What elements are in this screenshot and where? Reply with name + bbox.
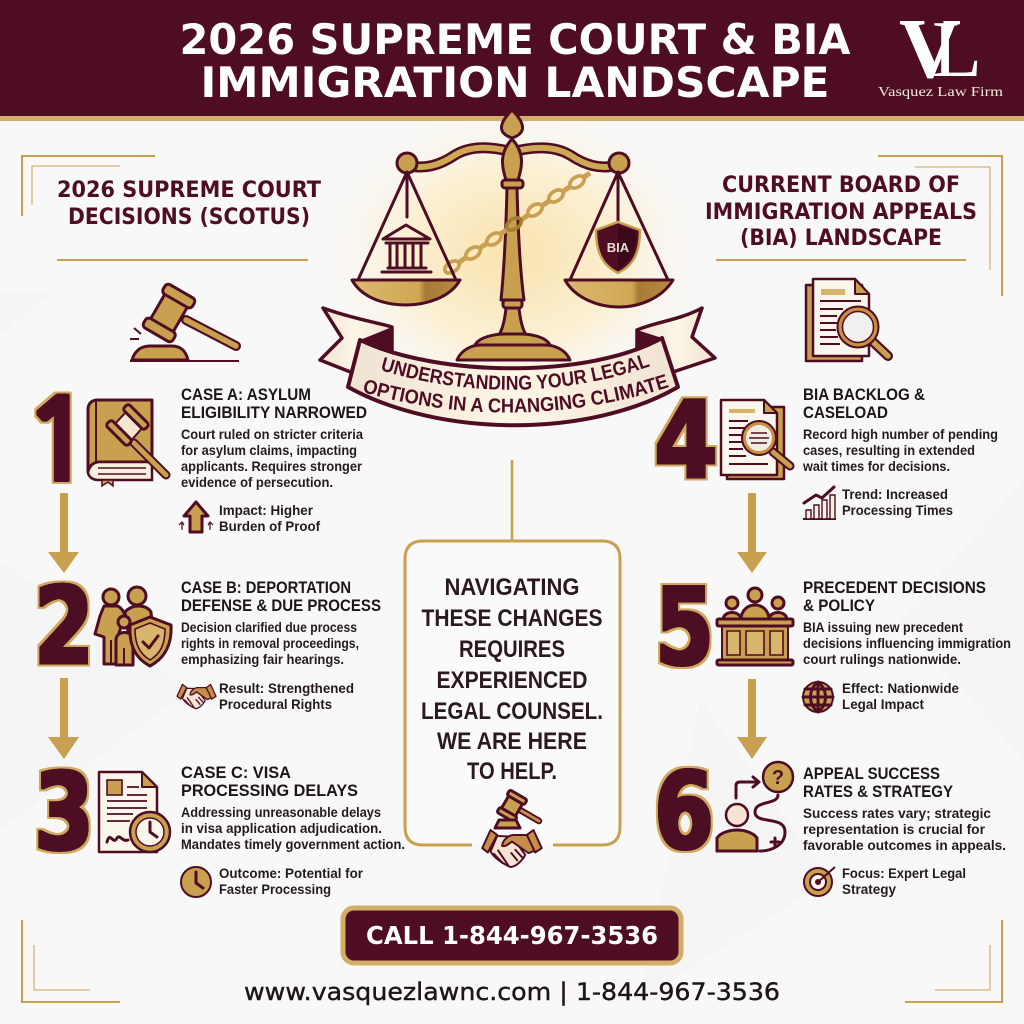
right pan: BIA bbox=[607, 240, 630, 255]
effect note: Effect: Nationwide bbox=[842, 680, 959, 696]
logo: Vasquez Law Firm bbox=[878, 0, 1003, 100]
case 1 text: for asylum claims, impacting bbox=[181, 442, 357, 458]
heading: BIA: (BIA) LANDSCAPE bbox=[740, 226, 942, 251]
case 4 text: Record high number of pending bbox=[803, 426, 998, 442]
case 6 text: Success rates vary; strategic bbox=[803, 805, 991, 821]
panel: case 5 bbox=[655, 566, 1011, 712]
pole bbox=[457, 110, 570, 360]
header band bbox=[0, 0, 1024, 121]
beam bbox=[397, 148, 629, 173]
result note: Procedural Rights bbox=[219, 696, 332, 712]
case 1 text: CASE A: ASYLUM bbox=[181, 386, 311, 404]
bottom corner frames bbox=[22, 920, 1002, 1002]
number 4: 4 bbox=[654, 379, 718, 502]
ribbon banner: UNDERSTANDING YOUR LEGAL bbox=[382, 355, 650, 390]
heading: BIA: IMMIGRATION APPEALS bbox=[705, 200, 977, 225]
heading: SCOTUS bbox=[57, 178, 321, 230]
case 6 text: favorable outcomes in appeals. bbox=[803, 837, 1006, 853]
center callout: THESE CHANGES bbox=[422, 605, 602, 632]
case 4 text: BIA BACKLOG & bbox=[803, 386, 925, 404]
icon: person with question bbox=[717, 762, 793, 851]
panel: case 3 bbox=[34, 751, 405, 897]
chain bbox=[443, 173, 590, 276]
case 3 text bbox=[181, 764, 405, 852]
number 1: 1 bbox=[22, 386, 96, 497]
title: 2026 SUPREME COURT & BIA bbox=[180, 15, 851, 64]
case 4 text: wait times for decisions. bbox=[802, 458, 950, 474]
center callout bbox=[405, 541, 620, 867]
case 1 text: Court ruled on stricter criteria bbox=[181, 426, 363, 442]
logo: Vasquez Law Firm: L bbox=[932, 6, 982, 94]
icon: court bench bbox=[717, 588, 793, 665]
impact note: Impact: Higher bbox=[219, 502, 314, 518]
center callout: EXPERIENCED bbox=[436, 667, 588, 694]
focus note bbox=[804, 865, 966, 897]
arrow 4 to 5 bbox=[737, 493, 767, 573]
right pan bbox=[565, 172, 673, 307]
icon: document review bbox=[721, 400, 790, 479]
ribbon banner bbox=[318, 306, 717, 428]
case 3 text: PROCESSING DELAYS bbox=[181, 782, 358, 800]
case 5 text: & POLICY bbox=[803, 597, 875, 615]
case 2 text: emphasizing fair hearings. bbox=[181, 651, 344, 667]
case 6 text bbox=[803, 765, 1006, 853]
trend note: Trend: Increased bbox=[842, 486, 948, 502]
arrow 2 to 3 bbox=[48, 678, 79, 759]
case 2 text: Decision clarified due process bbox=[181, 619, 357, 635]
center callout: WE ARE HERE bbox=[437, 728, 587, 755]
case 2 text: rights in removal proceedings, bbox=[181, 635, 359, 651]
case 4 text: CASELOAD bbox=[803, 404, 888, 422]
case 5 text: court rulings nationwide. bbox=[803, 651, 961, 667]
center callout: REQUIRES bbox=[459, 636, 565, 663]
case 1 text: applicants. Requires stronger bbox=[181, 458, 363, 474]
heading: BIA: CURRENT BOARD OF bbox=[722, 173, 960, 198]
outcome note bbox=[181, 865, 364, 897]
left heading frame bbox=[22, 156, 308, 260]
icon: gavel left bbox=[130, 283, 239, 361]
effect note bbox=[803, 680, 959, 712]
number 6: 6 bbox=[654, 750, 714, 873]
icon: law book and gavel bbox=[88, 400, 166, 486]
icon: scales of justice bbox=[352, 110, 673, 360]
focus note: Focus: Expert Legal bbox=[842, 865, 966, 881]
impact note: Burden of Proof bbox=[219, 518, 320, 534]
connector line bbox=[511, 460, 513, 541]
focus note: Strategy bbox=[842, 881, 896, 897]
call button: CALL 1-844-967-3536 bbox=[366, 921, 658, 950]
outcome note: Outcome: Potential for bbox=[219, 865, 364, 881]
title: IMMIGRATION LANDSCAPE bbox=[200, 58, 830, 107]
number 5: 5 bbox=[655, 566, 714, 689]
heading: BIA bbox=[705, 173, 977, 251]
number 3: 3 bbox=[34, 751, 94, 874]
case 3 text: CASE C: VISA bbox=[181, 764, 291, 782]
trend note bbox=[803, 486, 953, 519]
center callout: NAVIGATING bbox=[444, 574, 580, 601]
heading: SCOTUS: 2026 SUPREME COURT bbox=[57, 178, 321, 203]
case 1 text bbox=[181, 386, 367, 490]
left pan bbox=[352, 172, 460, 305]
case 1 text: ELIGIBILITY NARROWED bbox=[181, 404, 367, 422]
icon: gavel and handshake bbox=[482, 790, 542, 867]
ribbon banner: OPTIONS IN A CHANGING CLIMATE bbox=[364, 374, 669, 412]
case 6 text: representation is crucial for bbox=[803, 821, 986, 837]
case 5 text: PRECEDENT DECISIONS bbox=[803, 579, 986, 597]
icon: family and shield bbox=[95, 587, 171, 666]
case 2 text bbox=[181, 579, 381, 667]
outcome note: Faster Processing bbox=[219, 881, 331, 897]
panel: case 4 bbox=[654, 379, 998, 519]
arrow 5 to 6 bbox=[737, 679, 767, 759]
panel: case 1 bbox=[22, 386, 367, 534]
icon: document and clock bbox=[99, 772, 170, 852]
case 5 text: decisions influencing immigration bbox=[803, 635, 1011, 651]
case 3 text: in visa application adjudication. bbox=[181, 820, 382, 836]
logo: Vasquez Law Firm: V bbox=[899, 0, 961, 96]
case 2 text: CASE B: DEPORTATION bbox=[181, 579, 351, 597]
center callout: TO HELP. bbox=[467, 758, 557, 785]
number 2: 2 bbox=[34, 565, 94, 688]
icon: person with question: ? bbox=[772, 767, 784, 789]
logo: Vasquez Law Firm: Vasquez Law Firm bbox=[878, 85, 1003, 100]
case 3 text: Mandates timely government action. bbox=[181, 836, 405, 852]
case 4 text bbox=[802, 386, 998, 474]
case 6 text: APPEAL SUCCESS bbox=[803, 765, 940, 783]
center callout: LEGAL COUNSEL. bbox=[421, 698, 603, 725]
title bbox=[180, 15, 851, 107]
case 1 text: evidence of persecution. bbox=[181, 474, 333, 490]
case 5 text: BIA issuing new precedent bbox=[803, 619, 963, 635]
case 5 text bbox=[803, 579, 1011, 667]
icon: document and magnifier top right bbox=[806, 279, 888, 361]
website and phone: www.vasquezlawnc.com | 1-844-967-3536 bbox=[244, 978, 780, 1006]
result note: Result: Strengthened bbox=[219, 680, 354, 696]
result note bbox=[177, 680, 354, 712]
heading: SCOTUS: DECISIONS (SCOTUS) bbox=[68, 205, 310, 230]
panel: case 2 bbox=[34, 565, 381, 712]
case 6 text: RATES & STRATEGY bbox=[803, 783, 953, 801]
call button bbox=[343, 908, 681, 963]
panel: case 6 bbox=[654, 750, 1006, 897]
arrow 1 to 2 bbox=[48, 493, 79, 573]
central glow bbox=[307, 95, 717, 415]
case 2 text: DEFENSE & DUE PROCESS bbox=[181, 597, 381, 615]
trend note: Processing Times bbox=[842, 502, 953, 518]
impact note bbox=[179, 502, 320, 534]
right heading frame bbox=[716, 156, 1002, 296]
effect note: Legal Impact bbox=[842, 696, 924, 712]
case 4 text: cases, resulting in extended bbox=[803, 442, 975, 458]
case 3 text: Addressing unreasonable delays bbox=[181, 804, 381, 820]
